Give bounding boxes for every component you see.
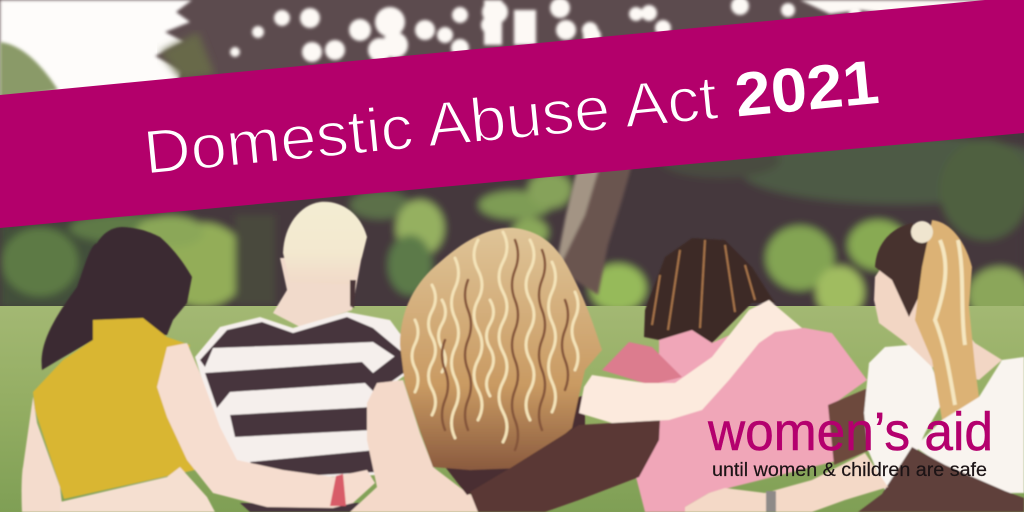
woman 5: ponytail and white top <box>685 220 1024 512</box>
woman 2: blonde crop and striped shirt <box>157 202 412 512</box>
banner title: Domestic Abuse Act 2021: Domestic Abuse Act 2021 <box>141 48 882 188</box>
logo: women's aid <box>707 402 993 481</box>
woman 3: long curly hair <box>350 228 602 512</box>
woman 1: dark hair and yellow top <box>22 227 215 512</box>
tree trunk <box>556 165 632 295</box>
middle distance trees and bushes <box>0 120 1024 323</box>
logo wordmark: women’s aid <box>707 402 993 462</box>
group of five women seen from behind <box>22 202 1024 512</box>
woman 4: dreadlocks and pink t-shirt <box>470 238 867 512</box>
grass <box>0 306 1024 512</box>
sky and tree canopy <box>0 0 1024 110</box>
logo tagline: until women & children are safe <box>712 460 987 481</box>
